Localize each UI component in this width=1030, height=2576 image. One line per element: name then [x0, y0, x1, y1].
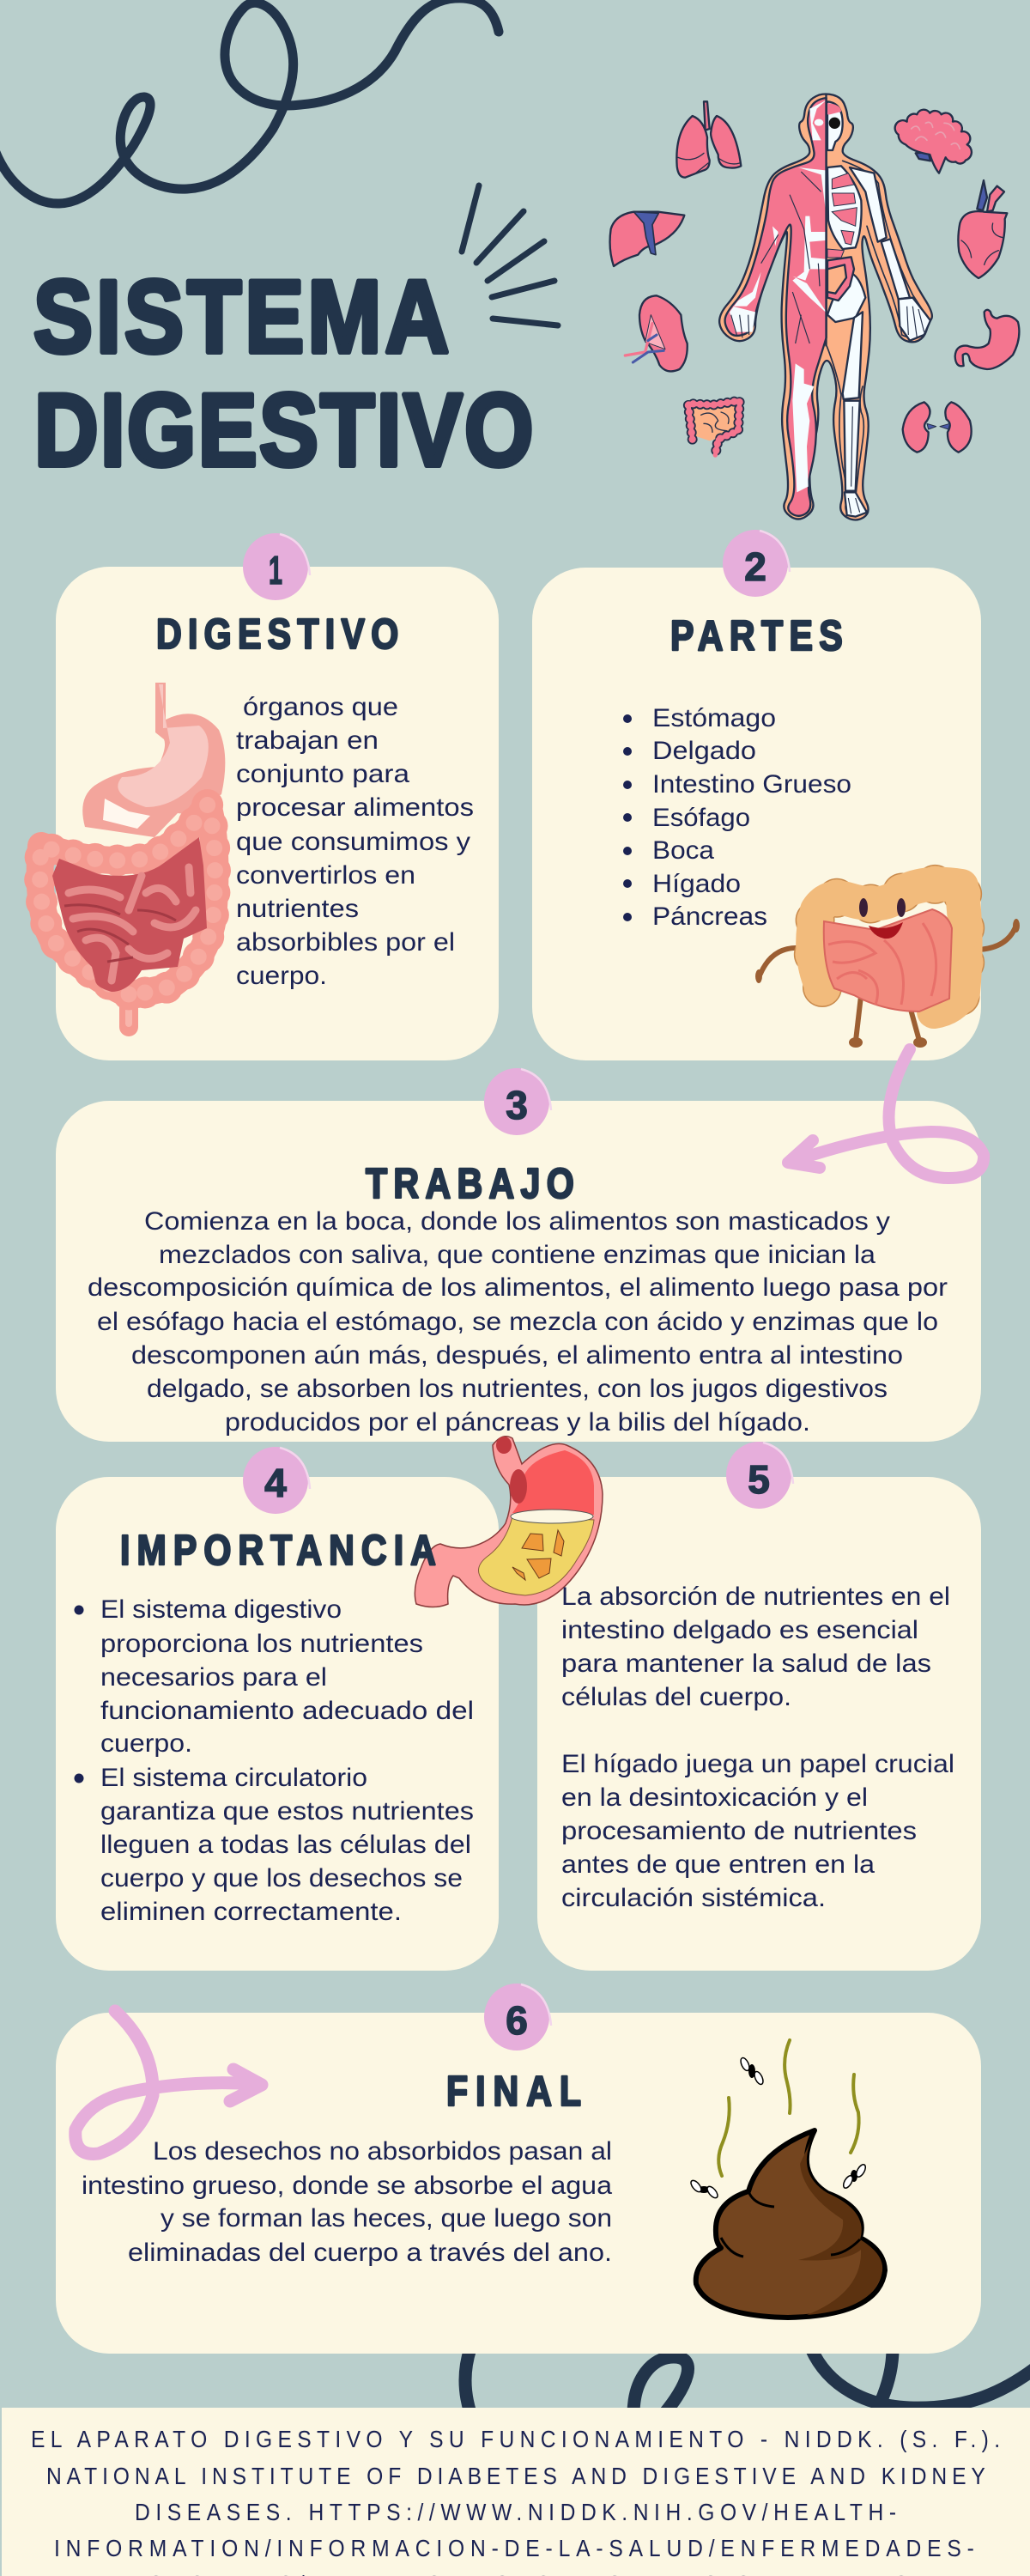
heading: importancia: IMPORTANCIA — [120, 1527, 436, 1574]
heading: trabajo: TRABAJO — [366, 1160, 574, 1207]
text: trabajo description: descomposición química de los alimentos, el alimento luego pasa por — [88, 1273, 948, 1302]
list: partes: Estómago — [652, 704, 776, 732]
text: trabajo description: el esófago hacia el estómago, se mezcla con ácido y enzimas que lo — [97, 1308, 938, 1336]
text: trabajo description — [88, 1207, 948, 1437]
decorative swirl bottom — [465, 2348, 1030, 2415]
panel: reference — [2, 2408, 1030, 2576]
text: digestivo description: cuerpo. — [236, 962, 327, 990]
illustration: digestive tract — [40, 683, 225, 1027]
text: digestivo description: procesar alimentos — [236, 793, 474, 822]
badge: number 6 — [484, 1984, 551, 2050]
badge: number 5 — [726, 1442, 793, 1509]
text: final description: eliminadas del cuerpo a través del ano. — [128, 2239, 612, 2267]
icon: poop with flies — [689, 2040, 885, 2318]
icon: kidneys — [903, 402, 972, 453]
heading: partes: PARTES — [670, 612, 843, 659]
text: absorción y hígado: procesamiento de nutrientes — [561, 1817, 917, 1845]
list: partes: Hígado — [652, 870, 741, 898]
text: trabajo description: delgado, se absorben los nutrientes, con los jugos digestivos — [147, 1375, 888, 1403]
panel: importancia card — [56, 1447, 499, 1971]
text: trabajo description: descomponen aún más, después, el alimento entra al intestino — [131, 1341, 903, 1370]
panel: absorción card — [537, 1442, 981, 1971]
text: absorción y hígado: en la desintoxicación y el — [561, 1783, 868, 1812]
title: SISTEMA — [33, 259, 449, 374]
panel: partes — [532, 530, 1020, 1060]
panel: final — [56, 1984, 981, 2354]
list: importancia: cuerpo. — [100, 1729, 192, 1758]
text: final description: y se forman las heces, que luego son — [161, 2204, 612, 2233]
list: importancia — [74, 1595, 474, 1926]
icon: heart — [958, 180, 1007, 278]
panel: digestivo — [40, 533, 499, 1060]
icon: intestines — [688, 401, 740, 455]
text: trabajo description: mezclados con saliva, que contiene enzimas que inician la — [159, 1241, 876, 1269]
panel: reference: EL APARATO DIGESTIVO Y SU FUNCIONAMIENTO - NIDDK. (S. F.). — [31, 2426, 1000, 2452]
badge: number 5: 5 — [748, 1457, 770, 1502]
heading: final: FINAL — [446, 2068, 581, 2115]
badge: number 2: 2 — [744, 544, 766, 589]
text: absorción y hígado: El hígado juega un papel crucial — [561, 1750, 954, 1778]
text: absorción y hígado: La absorción de nutrientes en el — [561, 1583, 950, 1611]
text: digestivo description: convertirlos en — [236, 861, 415, 890]
text: digestivo description: conjunto para — [236, 760, 409, 788]
list: importancia: funcionamiento adecuado del — [100, 1697, 474, 1725]
list: importancia: necesarios para el — [100, 1663, 327, 1692]
text: absorción y hígado: para mantener la salud de las — [561, 1649, 931, 1678]
badge: number 4 — [243, 1447, 310, 1514]
list: importancia: lleguen a todas las células del — [100, 1831, 471, 1859]
title: DIGESTIVO — [34, 373, 533, 488]
list: partes: Delgado — [652, 737, 756, 765]
text: absorción y hígado: circulación sistémica. — [561, 1884, 826, 1912]
badge: number 6: 6 — [506, 1998, 528, 2043]
text: absorción y hígado — [561, 1583, 954, 1912]
badge: number 4: 4 — [264, 1461, 287, 1505]
heading: digestivo: DIGESTIVO — [156, 611, 398, 658]
text: digestivo description: trabajan en — [236, 726, 379, 755]
panel: reference: INFORMATION/INFORMACION-DE-LA-SALUD/ENFERMEDADES- — [54, 2535, 974, 2561]
panel: trabajo — [56, 1068, 981, 1442]
text: absorción y hígado: células del cuerpo. — [561, 1683, 791, 1711]
list: importancia: proporciona los nutrientes — [100, 1630, 423, 1658]
panel: reference: NATIONAL INSTITUTE OF DIABETES AND DIGESTIVE AND KIDNEY — [46, 2463, 985, 2489]
badge: number 3 — [484, 1068, 551, 1135]
badge: number 3: 3 — [506, 1083, 528, 1127]
badge: number 1: 1 — [269, 548, 282, 592]
decorative swirl top left — [0, 0, 499, 204]
list: importancia: El sistema digestivo — [100, 1595, 342, 1624]
title — [33, 259, 533, 488]
list: importancia: garantiza que estos nutrientes — [100, 1797, 474, 1826]
illustration: stomach with food — [415, 1437, 603, 1607]
illustration: cartoon intestine — [755, 884, 1020, 1048]
list: importancia: eliminen correctamente. — [100, 1898, 402, 1926]
list: partes: Páncreas — [652, 902, 767, 931]
icon: lungs — [676, 101, 741, 178]
list: partes: Intestino Grueso — [652, 770, 851, 799]
arrow: pink looping arrow top — [788, 1049, 984, 1178]
text: absorción y hígado: antes de que entren en la — [561, 1850, 875, 1879]
text: trabajo description: Comienza en la boca, donde los alimentos son masticados y — [144, 1207, 890, 1236]
text: digestivo description: órganos que — [243, 693, 398, 721]
text: absorción y hígado: intestino delgado es esencial — [561, 1616, 918, 1644]
icon: liver — [610, 212, 684, 266]
text: digestivo description: que consumimos y — [236, 828, 470, 856]
text: final description: Los desechos no absorbidos pasan al — [153, 2137, 612, 2166]
illustration: human body and organs — [610, 94, 1019, 519]
arrow: pink looping arrow bottom — [76, 2011, 262, 2154]
text: digestivo description: absorbibles por el — [236, 928, 455, 957]
text: digestivo description — [236, 693, 474, 990]
text: final description: intestino grueso, donde se absorbe el agua — [82, 2172, 612, 2200]
badge: number 2 — [723, 530, 790, 597]
icon: sunburst lines — [462, 185, 558, 325]
panel: reference: DISEASES. HTTPS://WWW.NIDDK.NIH.GOV/HEALTH- — [135, 2499, 896, 2525]
icon: stomach organ — [955, 310, 1019, 369]
text: trabajo description: producidos por el páncreas y la bilis del hígado. — [225, 1408, 810, 1437]
body figure — [719, 94, 932, 519]
text: final description — [82, 2137, 612, 2267]
text: digestivo description: nutrientes — [236, 895, 359, 923]
list: partes: Boca — [652, 836, 714, 865]
list: importancia: cuerpo y que los desechos se — [100, 1864, 463, 1893]
icon: brain — [895, 110, 972, 173]
list: partes — [623, 704, 851, 931]
icon: spleen — [625, 295, 688, 371]
list: partes: Esófago — [652, 804, 750, 832]
badge: number 1 — [243, 533, 310, 600]
list: importancia: El sistema circulatorio — [100, 1764, 367, 1792]
